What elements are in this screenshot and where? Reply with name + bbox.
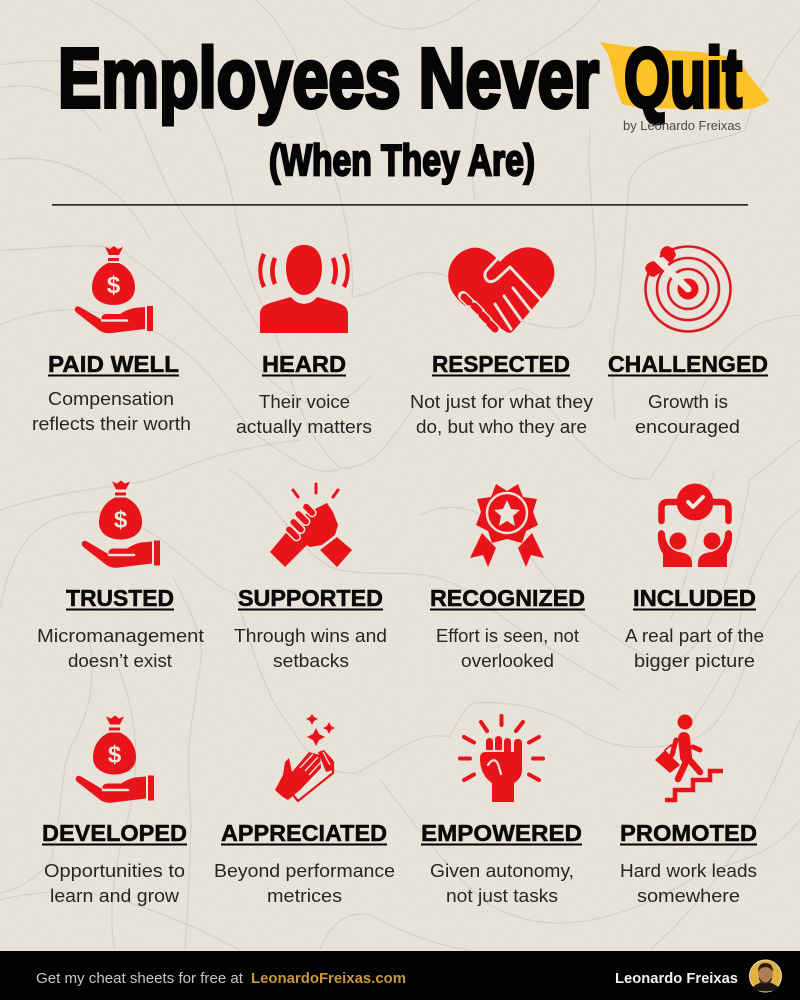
panel: paid well [32, 246, 191, 434]
heading: empowered: EMPOWERED [421, 820, 582, 846]
heading: respected: RESPECTED [432, 351, 570, 377]
icon: person climbing stairs [655, 714, 723, 800]
panel: respected [410, 247, 593, 437]
panel: empowered [421, 716, 582, 906]
heading: heard: HEARD [262, 351, 346, 377]
heading: paid well: PAID WELL [48, 351, 179, 377]
description: appreciated: Beyond performance [214, 861, 395, 881]
description: heard: actually matters [236, 417, 372, 437]
footer call to action: Get my cheat sheets for free at [36, 971, 243, 987]
title: Employees Never [58, 31, 599, 125]
description: supported [234, 626, 387, 671]
icon: money bag in hand: $ [114, 506, 128, 534]
description: empowered: not just tasks [446, 886, 558, 906]
icon: money bag in hand [82, 480, 160, 568]
subtitle: (When They Are) [269, 136, 535, 185]
icon: clapping hands with sparkles [275, 714, 335, 801]
description: supported: Through wins and [234, 626, 387, 646]
description: paid well: Compensation [48, 389, 174, 409]
icon: head with sound waves [258, 245, 350, 333]
description: promoted: somewhere [637, 886, 740, 906]
description: heard: Their voice [259, 392, 350, 412]
icon: team holding check [658, 484, 732, 567]
description: included: bigger picture [634, 651, 755, 671]
heading: supported: SUPPORTED [238, 585, 383, 611]
description: challenged: encouraged [635, 417, 740, 437]
description: paid well: reflects their worth [32, 414, 191, 434]
description: challenged [635, 392, 740, 437]
heading: challenged: CHALLENGED [608, 351, 768, 377]
description: trusted: doesn’t exist [68, 651, 172, 671]
icon: money bag in hand: $ [108, 742, 122, 768]
icon: award rosette [470, 484, 544, 567]
description: appreciated [214, 861, 395, 906]
heading: trusted: TRUSTED [66, 585, 174, 611]
description: empowered: Given autonomy, [430, 861, 574, 881]
description: appreciated: metrices [267, 886, 342, 906]
description: paid well [32, 389, 191, 434]
description: promoted [620, 861, 757, 906]
description: promoted: Hard work leads [620, 861, 757, 881]
description: included [625, 626, 764, 671]
heading: recognized: RECOGNIZED [430, 585, 585, 611]
description: supported: setbacks [273, 651, 349, 671]
title: Quit [624, 31, 742, 125]
heading: developed: DEVELOPED [42, 820, 187, 846]
panel: promoted [620, 714, 757, 906]
description: challenged: Growth is [648, 392, 728, 412]
icon: heart handshake [448, 247, 554, 333]
description: recognized [436, 626, 579, 671]
description: recognized: Effort is seen, not [436, 626, 579, 646]
brush highlight behind Quit [600, 42, 770, 110]
description: trusted: Micromanagement [37, 626, 204, 646]
description: developed [44, 861, 185, 906]
icon: raised fist [460, 716, 543, 802]
heading: promoted: PROMOTED [620, 820, 757, 846]
panel: appreciated [214, 714, 395, 906]
panel: developed [42, 716, 187, 906]
description: empowered [430, 861, 574, 906]
icon: money bag in hand: $ [107, 272, 121, 299]
author avatar [750, 960, 782, 992]
footer author name: Leonardo Freixas [615, 971, 738, 987]
icon: money bag in hand [76, 716, 154, 803]
icon: money bag in hand [75, 246, 153, 333]
description: developed: learn and grow [50, 886, 180, 906]
description: trusted [37, 626, 204, 671]
description: respected [410, 392, 593, 437]
description: heard [236, 392, 372, 437]
description: recognized: overlooked [461, 651, 554, 671]
panel: challenged [608, 246, 768, 437]
panel: recognized [430, 484, 585, 671]
panel: supported [234, 484, 387, 671]
description: included: A real part of the [625, 626, 764, 646]
description: respected: do, but who they are [416, 417, 587, 437]
icon: clasped hands [270, 484, 352, 567]
panel: trusted [37, 480, 204, 671]
icon: target with arrow [645, 246, 730, 332]
byline: by Leonardo Freixas [623, 118, 741, 133]
panel: heard [236, 245, 372, 437]
description: respected: Not just for what they [410, 392, 593, 412]
description: developed: Opportunities to [44, 861, 185, 881]
heading: appreciated: APPRECIATED [221, 820, 387, 846]
footer bar [0, 951, 800, 1000]
heading: included: INCLUDED [633, 585, 756, 611]
footer link: LeonardoFreixas.com [251, 971, 406, 987]
panel: included [625, 484, 764, 671]
